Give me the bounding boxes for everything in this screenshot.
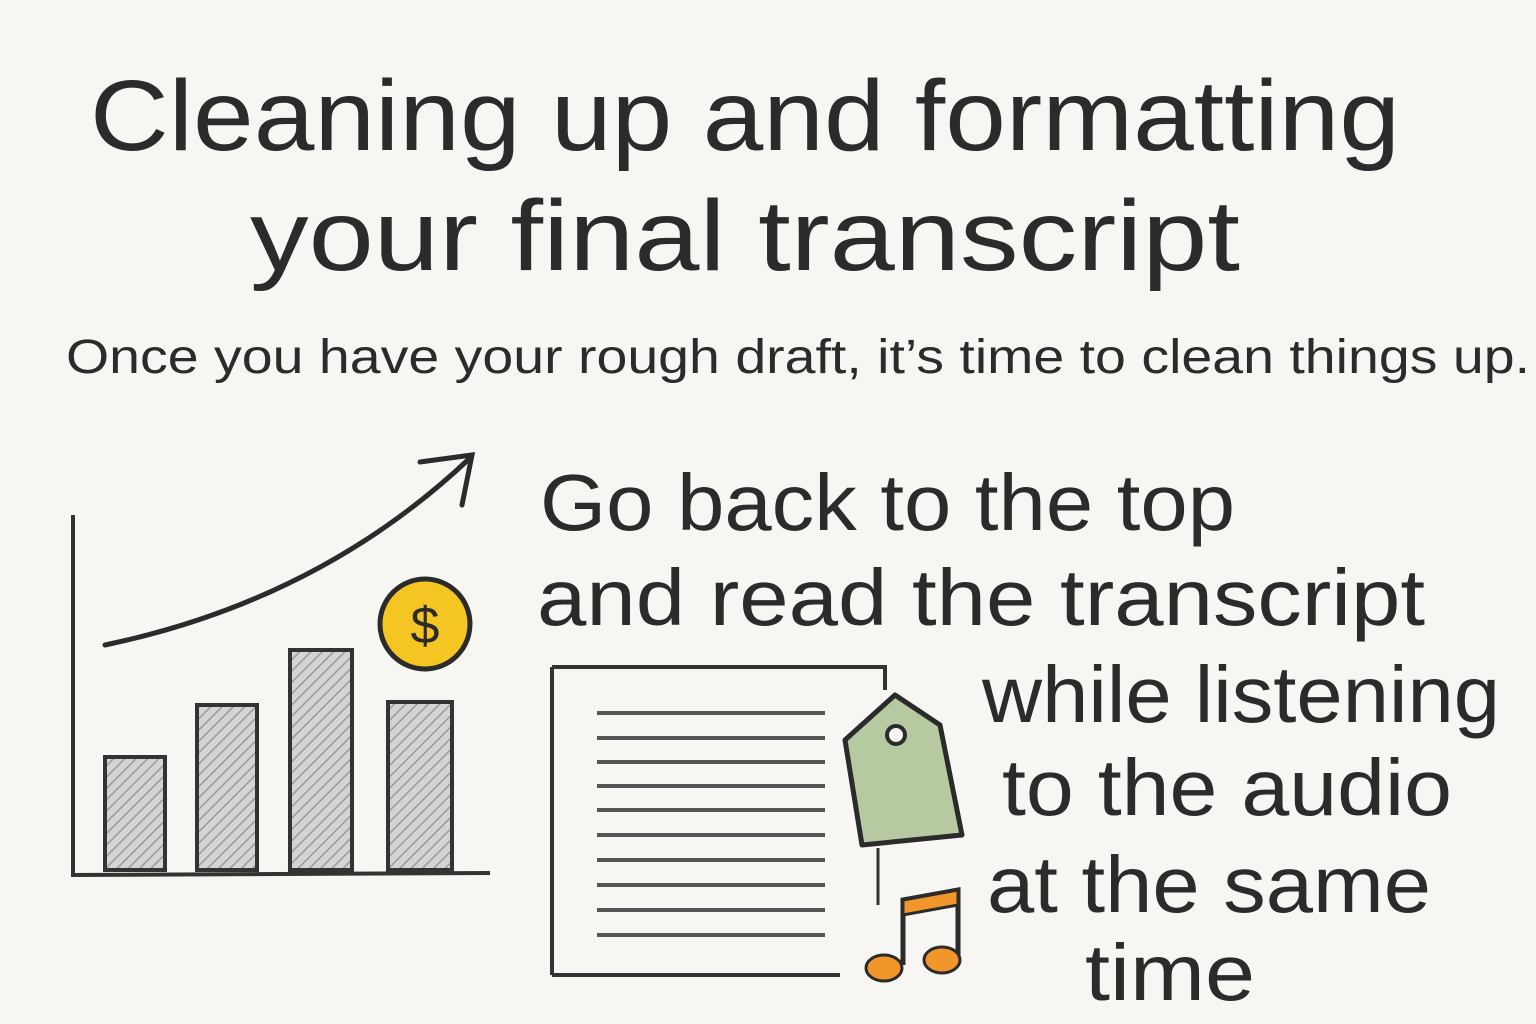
bar chart: [73, 515, 490, 875]
body text: [537, 458, 1500, 1017]
body text: at the same: [987, 840, 1431, 929]
body text: while listening: [981, 650, 1500, 739]
icon: dollar coin: $: [411, 597, 440, 655]
icon: document: [552, 667, 885, 975]
title: [90, 60, 1400, 292]
title: your final transcript: [250, 180, 1240, 292]
body text: Go back to the top: [540, 458, 1235, 547]
icon: music note: [866, 890, 960, 981]
icon: tag: [845, 695, 962, 905]
icon: dollar coin: [380, 579, 470, 669]
arrow: growth: [105, 455, 472, 645]
body text: and read the transcript: [537, 553, 1425, 642]
title: Cleaning up and formatting: [90, 60, 1400, 172]
subtitle: Once you have your rough draft, it’s time to clean things up.: [66, 331, 1530, 384]
body text: time: [1085, 928, 1255, 1017]
body text: to the audio: [1002, 743, 1452, 832]
